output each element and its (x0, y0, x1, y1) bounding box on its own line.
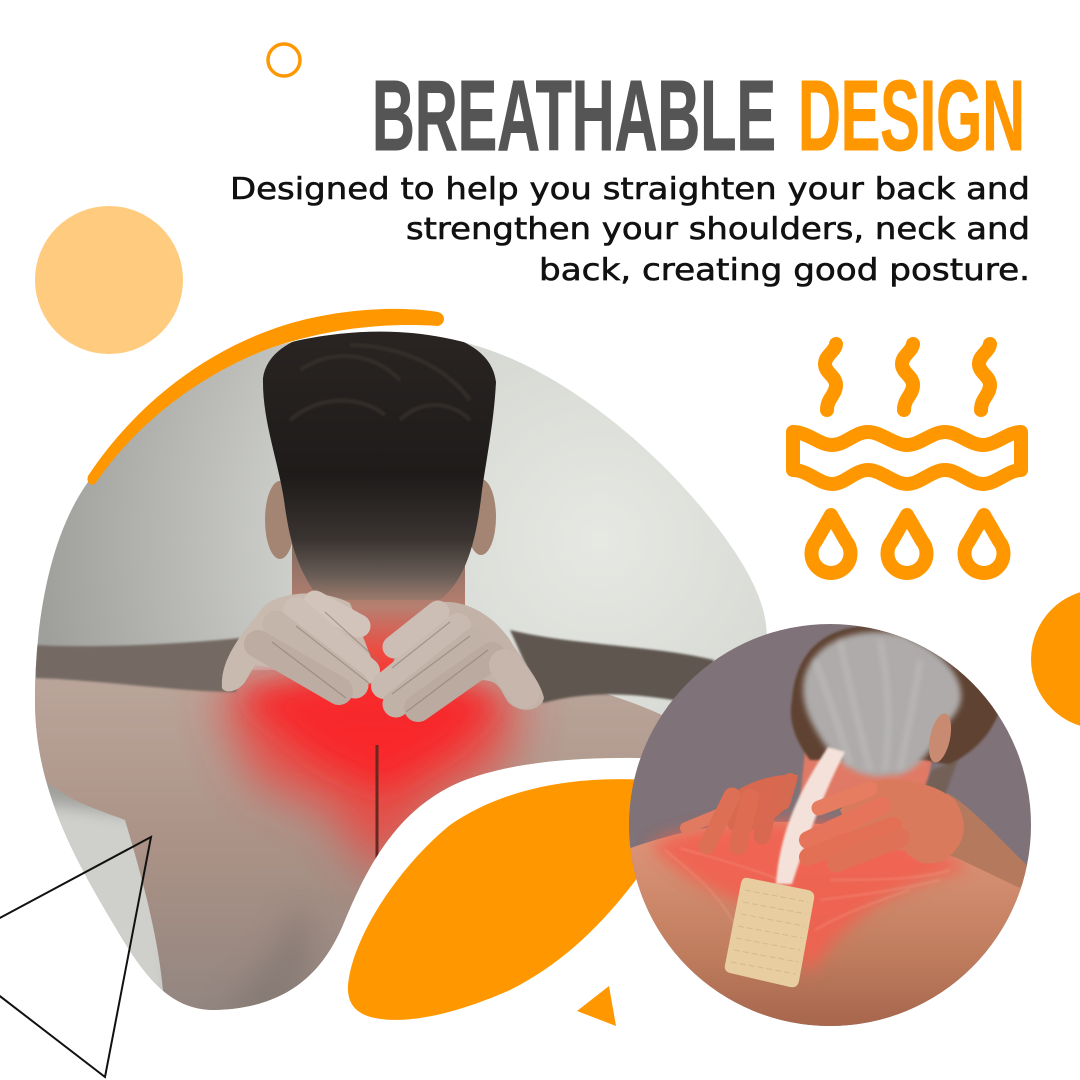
description text: strengthen your shoulders, neck and (406, 212, 1030, 247)
hair highlights (290, 345, 470, 420)
drops (812, 515, 1004, 573)
pale orange circle (35, 206, 183, 354)
neck (799, 752, 933, 799)
description text (230, 172, 1030, 288)
lower-left pale backdrop (51, 796, 163, 990)
hair (263, 326, 496, 600)
wavy patch band (793, 432, 1021, 484)
back shadow (240, 920, 312, 1008)
neck (292, 540, 465, 700)
ears (265, 481, 295, 559)
right hand and forearm (808, 780, 1032, 888)
icon: breathable layer with steam and drops (793, 344, 1021, 573)
finger gaps (272, 612, 380, 698)
title: BREATHABLE (372, 60, 776, 172)
muscle fibres (666, 848, 950, 930)
muscle fan (650, 821, 970, 975)
left hand (222, 593, 380, 700)
description text: Designed to help you straighten your back and (230, 172, 1030, 207)
steam waves (825, 344, 990, 410)
brown hair (791, 625, 998, 765)
orange half circle right (1031, 589, 1080, 729)
description text: back, creating good posture. (539, 253, 1030, 288)
orange blob (348, 779, 690, 1020)
finger gaps (392, 622, 488, 712)
back (625, 822, 1040, 1030)
inset photo: back patch (620, 620, 1040, 1040)
left hand (686, 775, 798, 846)
decorative ring (268, 44, 300, 76)
patch (725, 878, 814, 987)
stubble (924, 762, 958, 794)
red glow on back (215, 670, 525, 880)
grey hair haze (803, 632, 961, 776)
orange arc over main photo (87, 309, 444, 485)
back and shoulders (35, 670, 690, 1020)
right hand (384, 602, 544, 714)
forearms (35, 638, 240, 692)
ear (929, 714, 952, 762)
spine vapour (776, 747, 845, 884)
spine (376, 745, 378, 870)
orange small triangle (577, 986, 616, 1026)
hair streaks (815, 640, 920, 770)
black outline triangle (0, 837, 151, 1077)
main photo: man holding neck (35, 332, 767, 1010)
